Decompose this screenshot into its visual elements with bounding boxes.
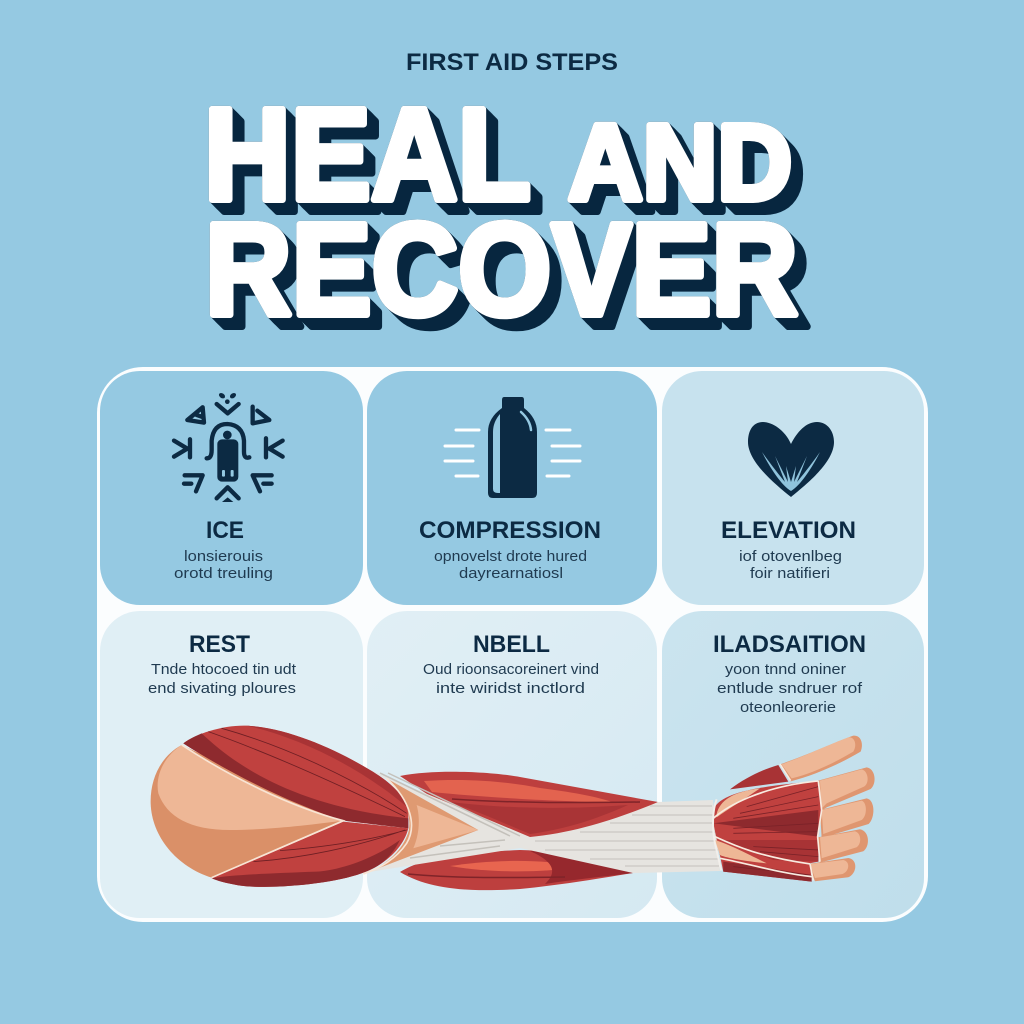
illustration: bandaged arm	[151, 726, 875, 890]
panel: ice	[100, 371, 363, 605]
text: ice description	[174, 548, 273, 582]
bandage	[363, 770, 720, 873]
text: iladsaition description: oteonleorerie	[740, 699, 836, 716]
icon: bottle	[445, 397, 580, 498]
upper arm	[151, 726, 478, 887]
panel: rest	[100, 611, 363, 918]
panel: compression	[367, 371, 657, 605]
text: elevation description: iof otovenlbeg	[739, 548, 842, 565]
text: iladsaition description	[717, 661, 863, 716]
heading: rest: REST	[189, 631, 250, 658]
panel: card grid	[97, 367, 928, 922]
panel: nbell	[367, 611, 657, 918]
title: AND	[568, 102, 792, 222]
text: compression description: dayrearnatiosl	[459, 565, 563, 582]
heading: elevation: ELEVATION	[721, 517, 856, 544]
heading: iladsaition: ILADSAITION	[713, 631, 866, 658]
heading: compression: COMPRESSION	[419, 517, 601, 544]
icon: heart	[748, 422, 834, 497]
text: iladsaition description: yoon tnnd oniner	[725, 661, 846, 678]
text: ice description: lonsierouis	[184, 548, 263, 565]
text: iladsaition description: entlude sndruer rof	[717, 680, 863, 697]
text: nbell description: Oud rioonsacoreinert vind	[423, 661, 599, 678]
text: nbell description: inte wiridst inctlord	[436, 680, 585, 697]
heading: nbell: NBELL	[473, 631, 550, 658]
icon: ice	[174, 392, 283, 502]
title	[204, 80, 798, 342]
text: elevation description: foir natifieri	[750, 565, 830, 582]
text: rest description	[148, 661, 297, 697]
text: compression description: opnovelst drote hured	[434, 548, 587, 565]
title: HEAL	[204, 80, 531, 228]
text: nbell description	[423, 661, 599, 697]
title: RECOVER	[205, 196, 798, 342]
text: compression description	[434, 548, 587, 582]
text: ice description: orotd treuling	[174, 565, 273, 582]
heading: ice: ICE	[206, 517, 244, 544]
forearm muscles	[400, 772, 658, 890]
text: elevation description	[739, 548, 842, 582]
hand	[713, 736, 875, 882]
panel: elevation	[662, 371, 924, 605]
fingers	[780, 736, 875, 881]
eyebrow heading: FIRST AID STEPS	[406, 49, 618, 76]
text: rest description: Tnde htocoed tin udt	[151, 661, 297, 678]
text: rest description: end sivating ploures	[148, 680, 296, 697]
panel: iladsaition	[662, 611, 924, 918]
